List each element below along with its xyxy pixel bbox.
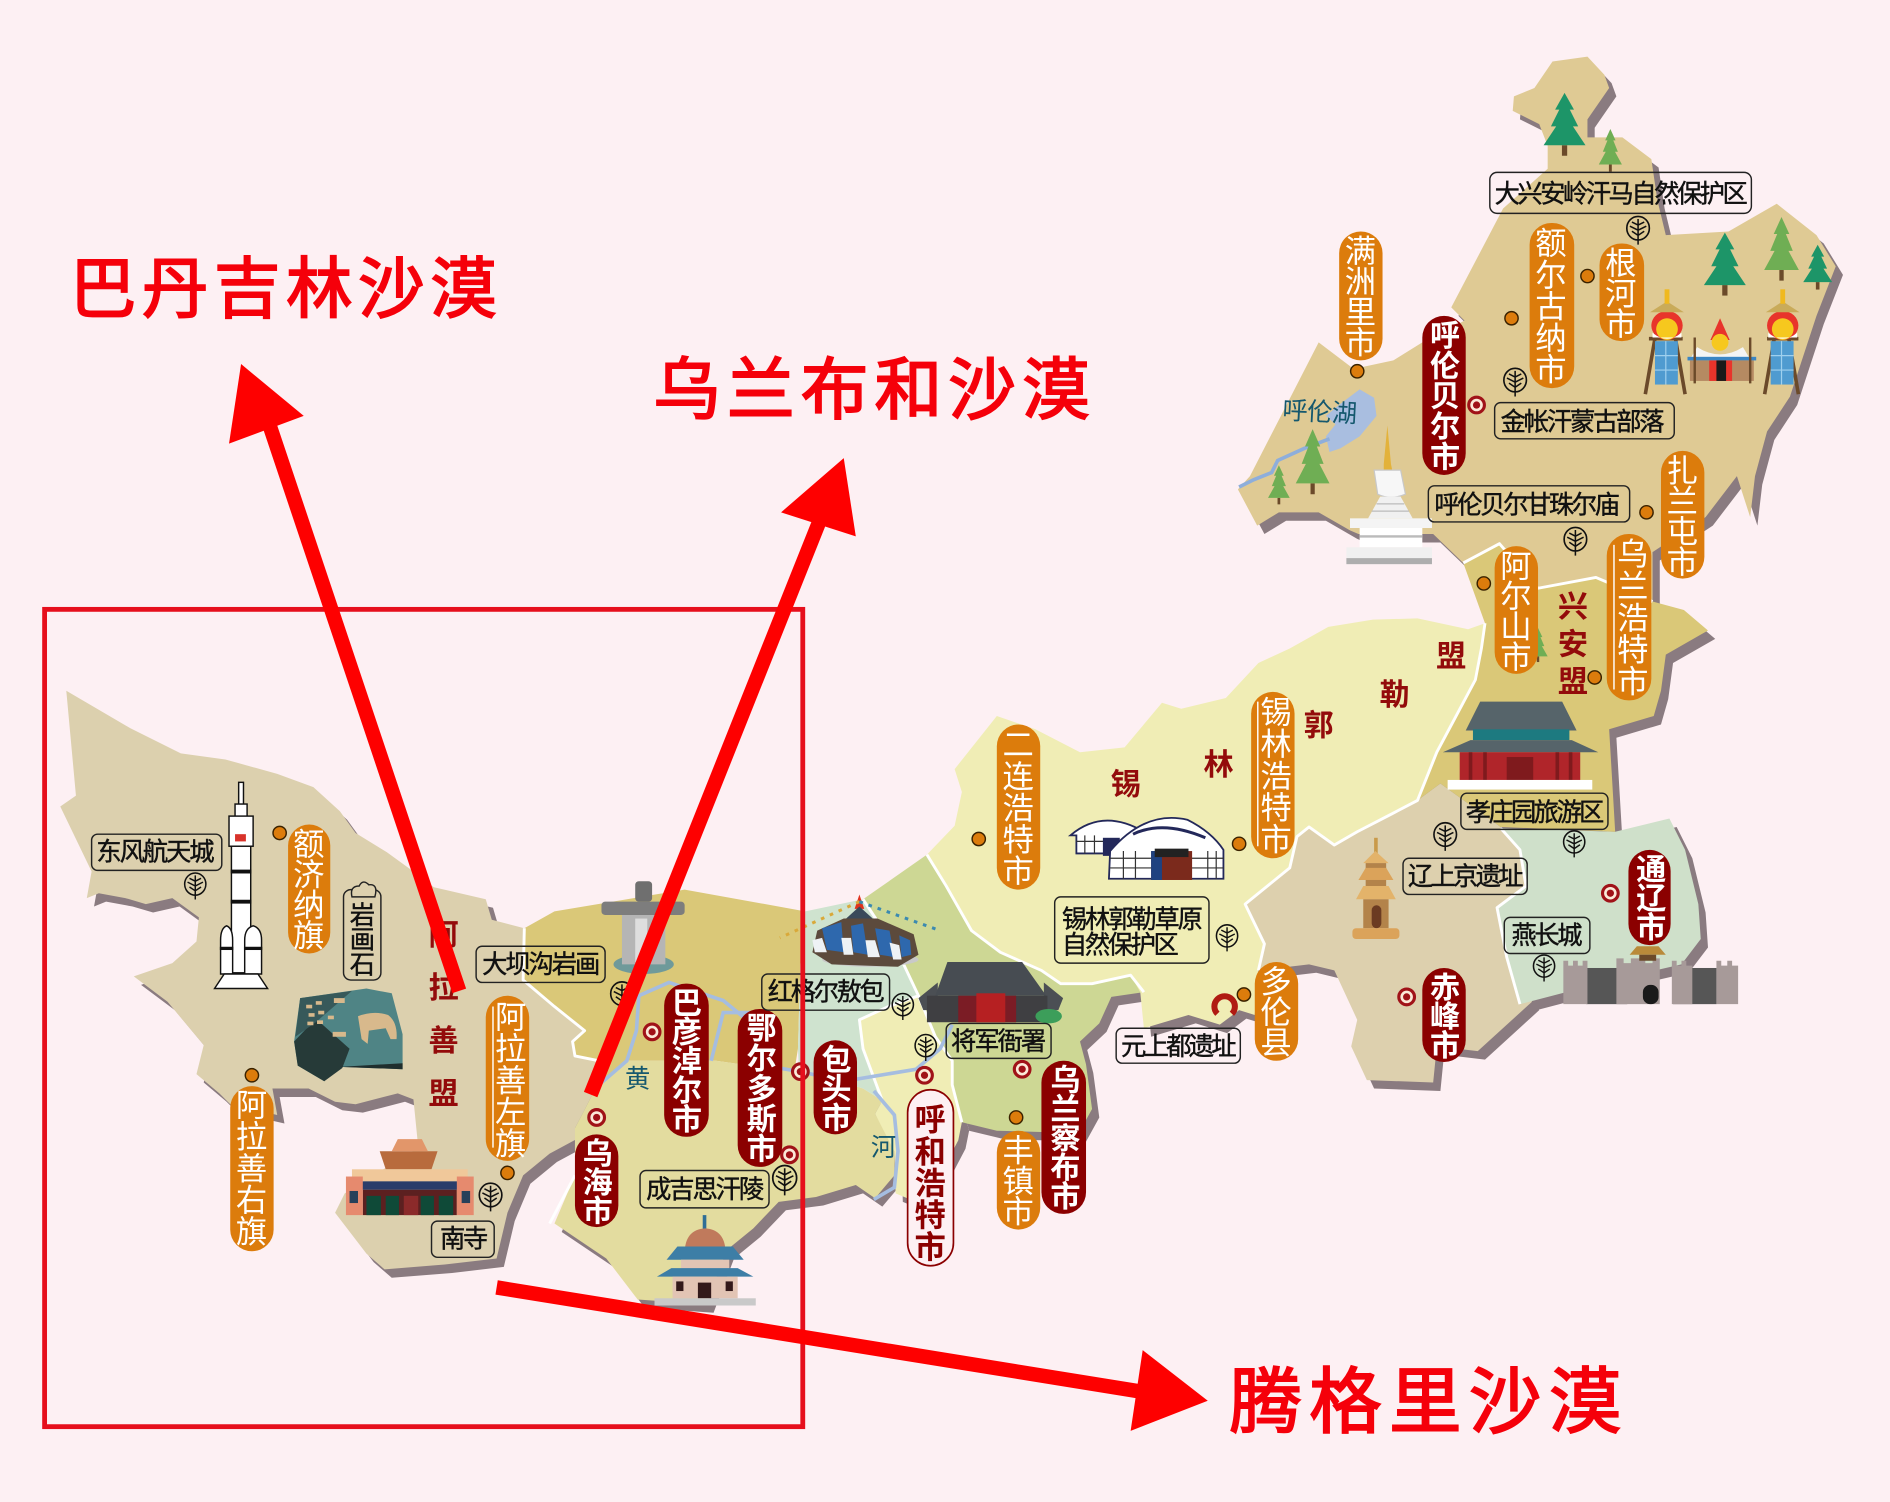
label: 元上都遗址: 元上都遗址 <box>1121 1033 1237 1061</box>
label: 燕长城 <box>1504 917 1590 954</box>
league: 兴安盟: 安 <box>1558 628 1588 662</box>
arrow to Badain Jaran <box>229 364 459 991</box>
league: 阿拉善盟: 阿 <box>429 919 459 952</box>
orange city names: 阿拉善右旗 <box>232 1089 267 1246</box>
league: 兴安盟: 兴 <box>1558 590 1588 624</box>
icon: yurts <box>1070 818 1223 880</box>
league: 兴安盟: 盟 <box>1558 666 1588 699</box>
orange city names: 根河市 <box>1601 246 1636 339</box>
league: 兴安盟 <box>1558 590 1588 699</box>
label: 成吉思汗陵 <box>640 1170 769 1208</box>
red study-area rectangle <box>45 609 803 1427</box>
Yellow River <box>592 982 952 1199</box>
capital pill: Hohhot <box>908 1090 953 1266</box>
water labels: 黄 <box>625 1065 650 1093</box>
dark red prefecture names: 赤峰市 <box>1425 972 1460 1060</box>
label: 东风航天城: 东风航天城 <box>96 839 215 867</box>
orange city names: 乌兰浩特市 <box>1613 537 1648 697</box>
league: 阿拉善盟 <box>429 919 459 1111</box>
icon: stone statue <box>601 881 685 974</box>
capital pill: Hohhot: 呼和浩特市 <box>911 1103 946 1262</box>
league: 锡林郭勒盟: 锡 <box>1111 767 1141 801</box>
arrow to Ulan Buh <box>591 458 856 1095</box>
dark red prefecture names: 鄂尔多斯市 <box>742 1013 777 1164</box>
label: 红格尔敖包: 红格尔敖包 <box>768 979 885 1007</box>
orange city names: 丰镇市 <box>999 1133 1034 1226</box>
region: Tongliao <box>1497 819 1701 1004</box>
orange city names: 扎兰屯市 <box>1663 454 1698 577</box>
orange city names <box>232 226 1698 1246</box>
desert title: 腾格里沙漠: 腾格里沙漠 <box>1229 1343 1621 1448</box>
region: Bayannur <box>523 890 805 1093</box>
water labels: 河 <box>871 1134 896 1162</box>
league: 锡林郭勒盟: 勒 <box>1380 678 1410 712</box>
label: 孝庄园旅游区: 孝庄园旅游区 <box>1466 799 1604 827</box>
league: 锡林郭勒盟: 郭 <box>1304 708 1334 742</box>
league: 锡林郭勒盟: 盟 <box>1436 641 1466 674</box>
orange city names: 阿拉善左旗 <box>491 1001 526 1158</box>
label: 锡林郭勒草原自然保护区: 自然保护区 <box>1062 932 1179 960</box>
icon: Yuan Shangdu red mark <box>1214 996 1235 1014</box>
league: 锡林郭勒盟 <box>1111 641 1466 801</box>
label: 南寺: 南寺 <box>440 1226 488 1254</box>
label: 大坝沟岩画: 大坝沟岩画 <box>482 951 600 979</box>
Hulun Lake and river <box>1239 389 1377 487</box>
water labels: 呼伦湖 <box>1282 397 1358 429</box>
region: Alxa <box>60 691 599 1269</box>
label: 南寺 <box>432 1221 494 1257</box>
label: 辽上京遗址: 辽上京遗址 <box>1408 863 1524 891</box>
dark red prefecture names <box>578 319 1666 1226</box>
label: 金帐汗蒙古部落: 金帐汗蒙古部落 <box>1501 408 1665 436</box>
dark red prefecture names: 通辽市 <box>1631 853 1666 942</box>
dark red prefecture pills <box>575 316 1671 1227</box>
label: 岩画石 <box>344 882 381 980</box>
pine trees <box>1268 93 1832 662</box>
label: 锡林郭勒草原自然保护区: 锡林郭勒草原 <box>1062 906 1203 934</box>
league: 阿拉善盟: 拉 <box>429 971 459 1005</box>
league: 阿拉善盟: 盟 <box>429 1078 459 1111</box>
map regions <box>60 57 1836 1304</box>
region: Hohhot <box>859 996 962 1199</box>
label: 成吉思汗陵: 成吉思汗陵 <box>646 1176 764 1204</box>
dark red prefecture names: 呼伦贝尔市 <box>1425 319 1460 471</box>
map shadow <box>68 65 1843 1313</box>
water labels <box>625 397 1358 1162</box>
league: 阿拉善盟: 善 <box>429 1024 459 1058</box>
arrow to Tengger <box>497 1287 1208 1431</box>
label: 呼伦贝尔甘珠尔庙: 呼伦贝尔甘珠尔庙 <box>1434 492 1620 520</box>
region: Hinggan <box>1418 544 1708 832</box>
label: 大兴安岭汗马自然保护区 <box>1490 172 1751 213</box>
region: Ordos <box>554 1061 894 1304</box>
orange city names: 二连浩特市 <box>999 728 1034 886</box>
label: 锡林郭勒草原自然保护区 <box>1055 897 1209 963</box>
icon: pagoda <box>1352 838 1399 939</box>
label: 将军衙署: 将军衙署 <box>951 1028 1046 1056</box>
league names <box>429 590 1588 1111</box>
region: Hulunbuir <box>1238 57 1836 602</box>
dark red prefecture names: 巴彦淖尔市 <box>667 987 702 1134</box>
league: 锡林郭勒盟: 林 <box>1204 748 1234 782</box>
icon: ovoo <box>780 894 940 967</box>
dark red prefecture names: 包头市 <box>816 1043 851 1132</box>
attraction labels <box>92 172 1751 1257</box>
label: 岩画石: 岩画石 <box>346 902 375 976</box>
icon: Yan great wall <box>1563 946 1738 1004</box>
icon: Nansi temple <box>346 1139 474 1215</box>
orange city names: 阿尔山市 <box>1496 549 1531 672</box>
orange city pills <box>230 223 1704 1251</box>
icon: rocket <box>215 782 268 988</box>
region: Chifeng <box>1245 784 1532 1083</box>
dark red prefecture names: 乌海市 <box>578 1137 612 1226</box>
desert title: 巴丹吉林沙漠: 巴丹吉林沙漠 <box>70 236 497 332</box>
dark red prefecture names: 乌兰察布市 <box>1045 1063 1080 1211</box>
icon: Xiaozhuang garden building <box>1443 702 1598 790</box>
orange city names: 额济纳旗 <box>289 827 324 951</box>
orange city names: 额尔古纳市 <box>1531 226 1566 385</box>
region: Xilingol <box>927 618 1485 1028</box>
region: Baotou <box>798 899 918 1101</box>
label: 大兴安岭汗马自然保护区: 大兴安岭汗马自然保护区 <box>1495 181 1748 209</box>
icon: stupa <box>1346 426 1432 564</box>
desert title: 乌兰布和沙漠: 乌兰布和沙漠 <box>653 336 1090 433</box>
protected area leaf icons <box>185 216 1649 1211</box>
orange city dots <box>245 269 1653 1180</box>
icon: rock painting <box>294 988 403 1081</box>
icon: General's office <box>918 962 1063 1023</box>
prefecture-level red target dots <box>589 397 1618 1163</box>
label: 燕长城: 燕长城 <box>1512 922 1583 950</box>
orange city names: 锡林浩特市 <box>1257 695 1292 855</box>
icon: Mongol camp with flames <box>1645 289 1800 394</box>
icon: Genghis Khan mausoleum <box>655 1215 756 1306</box>
orange city names: 满洲里市 <box>1341 235 1376 357</box>
orange city names: 多伦县 <box>1257 965 1292 1058</box>
region: Ulanqab <box>863 855 1144 1133</box>
